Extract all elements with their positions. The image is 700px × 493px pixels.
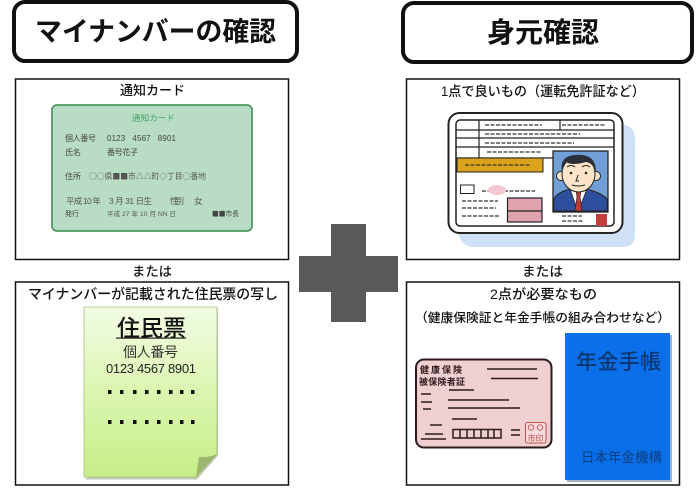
illustration: pension handbook: 年金手帳 [576,351,661,374]
panel: notification card [16,79,288,260]
illustration: green notification card [52,105,252,231]
stamp: 市印 [528,433,544,443]
panel title: notification card: 通知カード [120,83,185,98]
panel title: resident record copy: マイナンバーが記載された住民票の写し [28,286,278,302]
illustration: resident record paper [84,307,218,480]
illustration: green notification card: 女 [194,196,203,206]
illustration: green notification card: 番号花子 [107,147,138,157]
illustration: resident record paper: 住民票 [117,315,186,341]
illustration: green notification card: 個人番号 [65,133,96,143]
illustration: resident record paper: 0123 4567 8901 [106,361,196,376]
panel: two documents required [406,282,680,485]
illustration: green notification card: 通知カード [132,113,175,123]
panel title: two documents: 2点が必要なもの [490,286,597,302]
illustration: green notification card: ■■市長 [212,209,239,219]
illustration: green notification card: 平成 10 年 [66,196,101,206]
heading: my number check: マイナンバーの確認 [35,17,276,47]
illustration: green notification card: 平成 27 年 10 月 NN 日 [107,209,176,218]
panel: one document acceptable [406,79,680,260]
panel: resident record copy [16,282,288,485]
illustration: green notification card: 性別 [170,196,184,206]
illustration: green notification card: 氏名 [65,147,81,157]
illustration: driver's license [448,113,635,247]
illustration: license portrait [553,151,608,212]
heading: my number check [14,2,297,61]
illustration: pension handbook: 日本年金機構 [581,450,662,465]
illustration: pension handbook [565,333,672,482]
illustration: health insurance card: 健康保険 [420,364,462,375]
illustration: green notification card: 3 月 31 日生 [109,196,152,206]
heading: identity check: 身元確認 [487,17,599,48]
illustration: green notification card: 発行 [65,209,79,218]
dotted placeholder rows [108,390,194,424]
icon: plus sign [299,224,398,322]
illustration: health insurance card [416,360,552,448]
heading: identity check [403,3,692,62]
panel title: one document: 1点で良いもの（運転免許証など） [441,83,645,99]
illustration: green notification card: 住所 [65,171,81,181]
connector label: or (left): または [132,264,172,279]
illustration: green notification card: ○○県■■市△△町◇丁目○番地 [89,171,206,182]
panel subtitle: combination examples: （健康保険証と年金手帳の組み合わせなど） [415,310,670,325]
illustration: health insurance card: 被保険者証 [419,376,465,387]
illustration: green notification card: 0123 4567 8901 [107,134,177,143]
illustration: resident record paper: 個人番号 [123,344,178,360]
connector label: or (right): または [522,264,563,279]
